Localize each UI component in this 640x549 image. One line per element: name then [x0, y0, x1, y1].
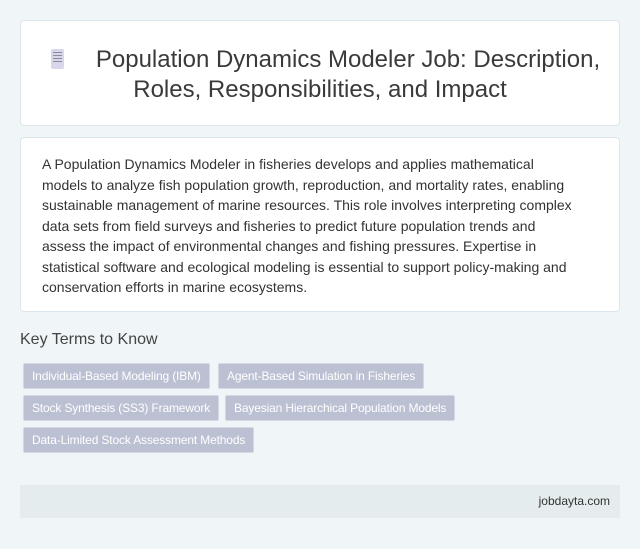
panel: title card: [20, 20, 620, 126]
tags: [23, 363, 455, 453]
tag 1: Individual-Based Modeling (IBM): [32, 369, 201, 383]
tag 2: Agent-Based Simulation in Fisheries: [227, 369, 415, 383]
panel: description: [20, 137, 620, 312]
tag 4: [225, 395, 455, 421]
text block: description: A Population Dynamics Modeler in fisheries develops and applies mathematical models to analyze fish population growth, reproduction, and mortality rates, enabling sustainable management of marine resources. This role involves interpreting complex data sets from field surveys and fisheries to predict future population trends and assess the impact of environmental changes and fishing pressures. Expertise in statistical software and ecological modeling is essential to support policy-making and conservation efforts in marine ecosystems.: [42, 156, 572, 295]
tag 1: [23, 363, 210, 389]
heading: key terms: Key Terms to Know: [20, 331, 158, 348]
tag 2: [218, 363, 424, 389]
title: Population Dynamics Modeler Job: Description, Roles, Responsibilities, and Impact: [96, 46, 600, 103]
tag 3: [23, 395, 219, 421]
tag 5: Data-Limited Stock Assessment Methods: [32, 433, 245, 447]
tag 3: Stock Synthesis (SS3) Framework: [32, 401, 210, 415]
tag 5: [23, 427, 254, 453]
tag 4: Bayesian Hierarchical Population Models: [234, 401, 446, 415]
footer text: jobdayta.com: [539, 494, 610, 508]
footer: [20, 485, 620, 518]
